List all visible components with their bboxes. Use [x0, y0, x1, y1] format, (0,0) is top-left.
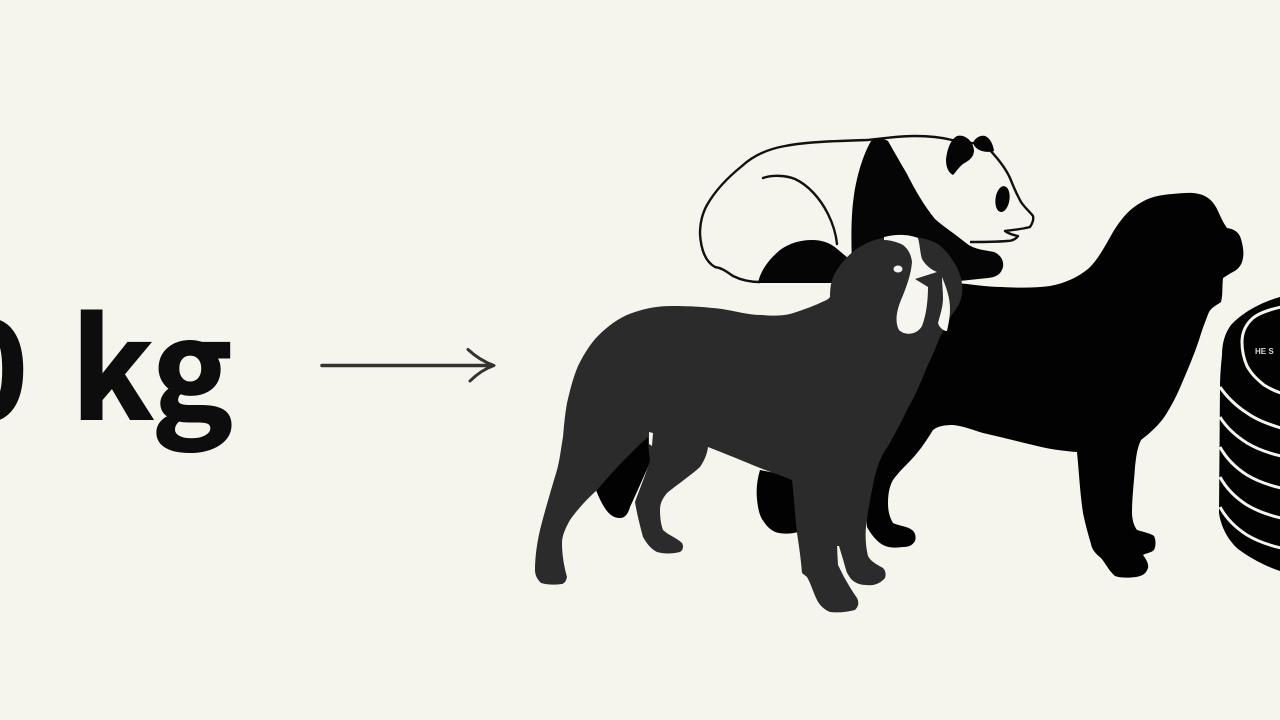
icon: front dog [535, 235, 962, 612]
icon: black dog [757, 193, 1243, 578]
white slit between legs [837, 546, 848, 577]
panda eye [994, 185, 1011, 213]
panda shoulder and arm [851, 139, 1003, 282]
stack body [1219, 297, 1280, 571]
icon: weight plate stack [1219, 297, 1280, 571]
white sliver by tail [649, 432, 653, 446]
panda thigh [758, 240, 848, 283]
icon: tail of front dog [596, 436, 651, 518]
icon: panda [700, 136, 1033, 283]
panda ears [946, 136, 974, 175]
arrow [322, 350, 494, 381]
weight label: kg [71, 262, 233, 459]
panda outline [700, 136, 1033, 282]
panda leg line [763, 176, 837, 244]
white face stripe [938, 277, 950, 331]
black dog rear leg [757, 470, 798, 534]
white face blaze [884, 235, 937, 334]
dog eye [894, 266, 902, 272]
black dog body [860, 193, 1243, 578]
stack stripes [1220, 307, 1280, 548]
plate label: HE S [1255, 347, 1274, 356]
front dog silhouette [535, 236, 962, 612]
